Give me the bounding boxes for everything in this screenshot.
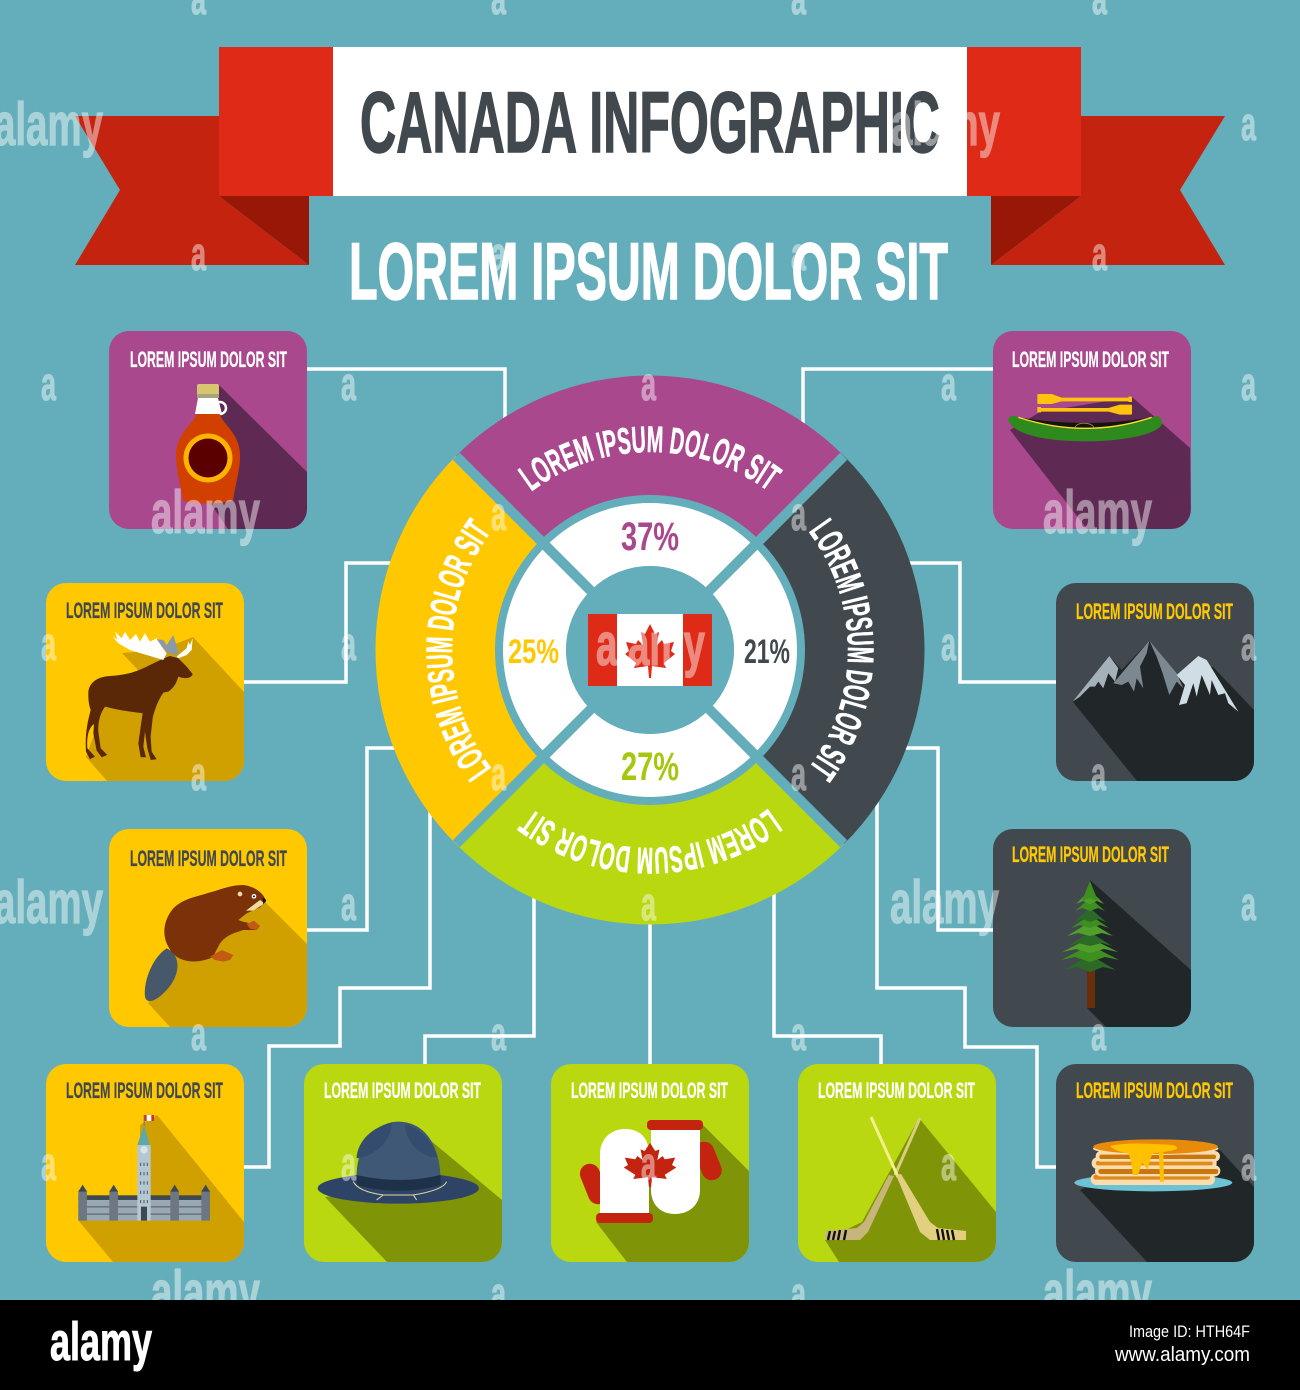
white inner ring	[503, 503, 797, 797]
watermark: a	[791, 1267, 806, 1320]
watermark: a	[641, 877, 656, 930]
watermark: a	[941, 1137, 956, 1190]
right ribbon tail	[991, 116, 1225, 265]
watermark: a	[491, 227, 506, 280]
card: canoe	[993, 331, 1191, 529]
watermark: a	[341, 357, 356, 410]
watermark: a	[491, 1267, 506, 1320]
watermark: a	[641, 357, 656, 410]
curved label bottom: LOREM IPSUM DOLOR SIT	[516, 808, 783, 874]
left ribbon tail	[75, 116, 309, 265]
icon: syrup bottle	[176, 384, 240, 504]
percent 27: 27%	[621, 745, 679, 789]
icon: beaver	[145, 885, 266, 1001]
watermark: a	[1091, 747, 1106, 800]
card label: LOREM IPSUM DOLOR SIT	[1012, 842, 1169, 867]
watermark: a	[341, 617, 356, 670]
card: maple syrup	[109, 331, 307, 529]
card label: LOREM IPSUM DOLOR SIT	[1012, 347, 1169, 372]
card: mittens	[551, 1064, 749, 1262]
card label: LOREM IPSUM DOLOR SIT	[571, 1078, 728, 1103]
watermark: a	[41, 617, 56, 670]
card label: LOREM IPSUM DOLOR SIT	[130, 347, 287, 372]
website: www.alamy.com	[1114, 1344, 1250, 1366]
watermark: alamy	[891, 91, 1000, 158]
watermark: a	[41, 357, 56, 410]
icon: parliament building	[78, 1115, 210, 1221]
watermark: a	[641, 1137, 656, 1190]
card: mountie hat	[304, 1064, 502, 1262]
watermark: alamy	[1043, 1259, 1152, 1326]
watermark: alamy	[1043, 479, 1152, 546]
watermark: alamy	[151, 1259, 260, 1326]
title banner	[75, 47, 1225, 265]
card label: LOREM IPSUM DOLOR SIT	[818, 1078, 975, 1103]
curved label top: LOREM IPSUM DOLOR SIT	[517, 426, 784, 492]
watermark: a	[791, 487, 806, 540]
percent 37: 37%	[621, 515, 679, 559]
card label: LOREM IPSUM DOLOR SIT	[324, 1078, 481, 1103]
card: pine tree	[993, 829, 1191, 1027]
connector lines	[244, 369, 1056, 1167]
watermark: a	[941, 617, 956, 670]
watermark: a	[1241, 97, 1256, 150]
card: moose	[46, 583, 244, 781]
watermark: a	[191, 227, 206, 280]
watermark: a	[1241, 617, 1256, 670]
card: pancakes	[1056, 1064, 1254, 1262]
circular diagram	[376, 376, 924, 924]
watermark: a	[491, 747, 506, 800]
icon: canoe and paddles	[1008, 394, 1162, 441]
watermark: a	[341, 1137, 356, 1190]
icon: canadian flag	[588, 614, 712, 686]
icon: ranger hat	[318, 1122, 479, 1204]
watermark: a	[791, 747, 806, 800]
card: beaver	[109, 829, 307, 1027]
footer bar	[0, 1300, 1300, 1390]
card: hockey sticks	[798, 1064, 996, 1262]
watermark: a	[1241, 877, 1256, 930]
green segment	[456, 650, 844, 925]
icon: moose	[86, 632, 193, 760]
watermark: alamy	[151, 479, 260, 546]
card: parliament	[46, 1064, 244, 1262]
card label: LOREM IPSUM DOLOR SIT	[66, 1078, 223, 1103]
watermark: a	[1091, 1007, 1106, 1060]
watermark: a	[1241, 357, 1256, 410]
curved label right: LOREM IPSUM DOLOR SIT	[808, 517, 874, 784]
dark segment	[650, 456, 925, 844]
watermark: alamy	[890, 869, 999, 936]
watermark: a	[191, 747, 206, 800]
watermark: a	[941, 357, 956, 410]
percent 21: 21%	[744, 633, 790, 671]
yellow segment	[375, 456, 650, 844]
watermark: a	[41, 1137, 56, 1190]
watermark: a	[791, 1007, 806, 1060]
watermark: a	[1241, 1137, 1256, 1190]
watermark: a	[491, 1007, 506, 1060]
icon: pine tree	[1061, 881, 1119, 1008]
watermark: a	[791, 227, 806, 280]
watermark: a	[1092, 227, 1107, 280]
card: mountains	[1056, 583, 1254, 781]
watermark: a	[491, 487, 506, 540]
footer logo: alamy	[50, 1312, 152, 1372]
watermark: a	[191, 1007, 206, 1060]
icon: mittens	[577, 1120, 725, 1223]
icon: snowy mountains	[1072, 641, 1238, 712]
purple segment	[456, 375, 844, 650]
image id: Image ID: HTH64F	[1129, 1322, 1250, 1341]
icon: pancakes	[1074, 1139, 1232, 1191]
percent 25: 25%	[508, 633, 559, 671]
watermark: alamy	[596, 611, 705, 678]
curved label left: LOREM IPSUM DOLOR SIT	[426, 516, 492, 783]
card label: LOREM IPSUM DOLOR SIT	[130, 846, 287, 871]
card label: LOREM IPSUM DOLOR SIT	[66, 598, 223, 623]
watermark: a	[341, 877, 356, 930]
icon: hockey sticks	[825, 1117, 966, 1240]
